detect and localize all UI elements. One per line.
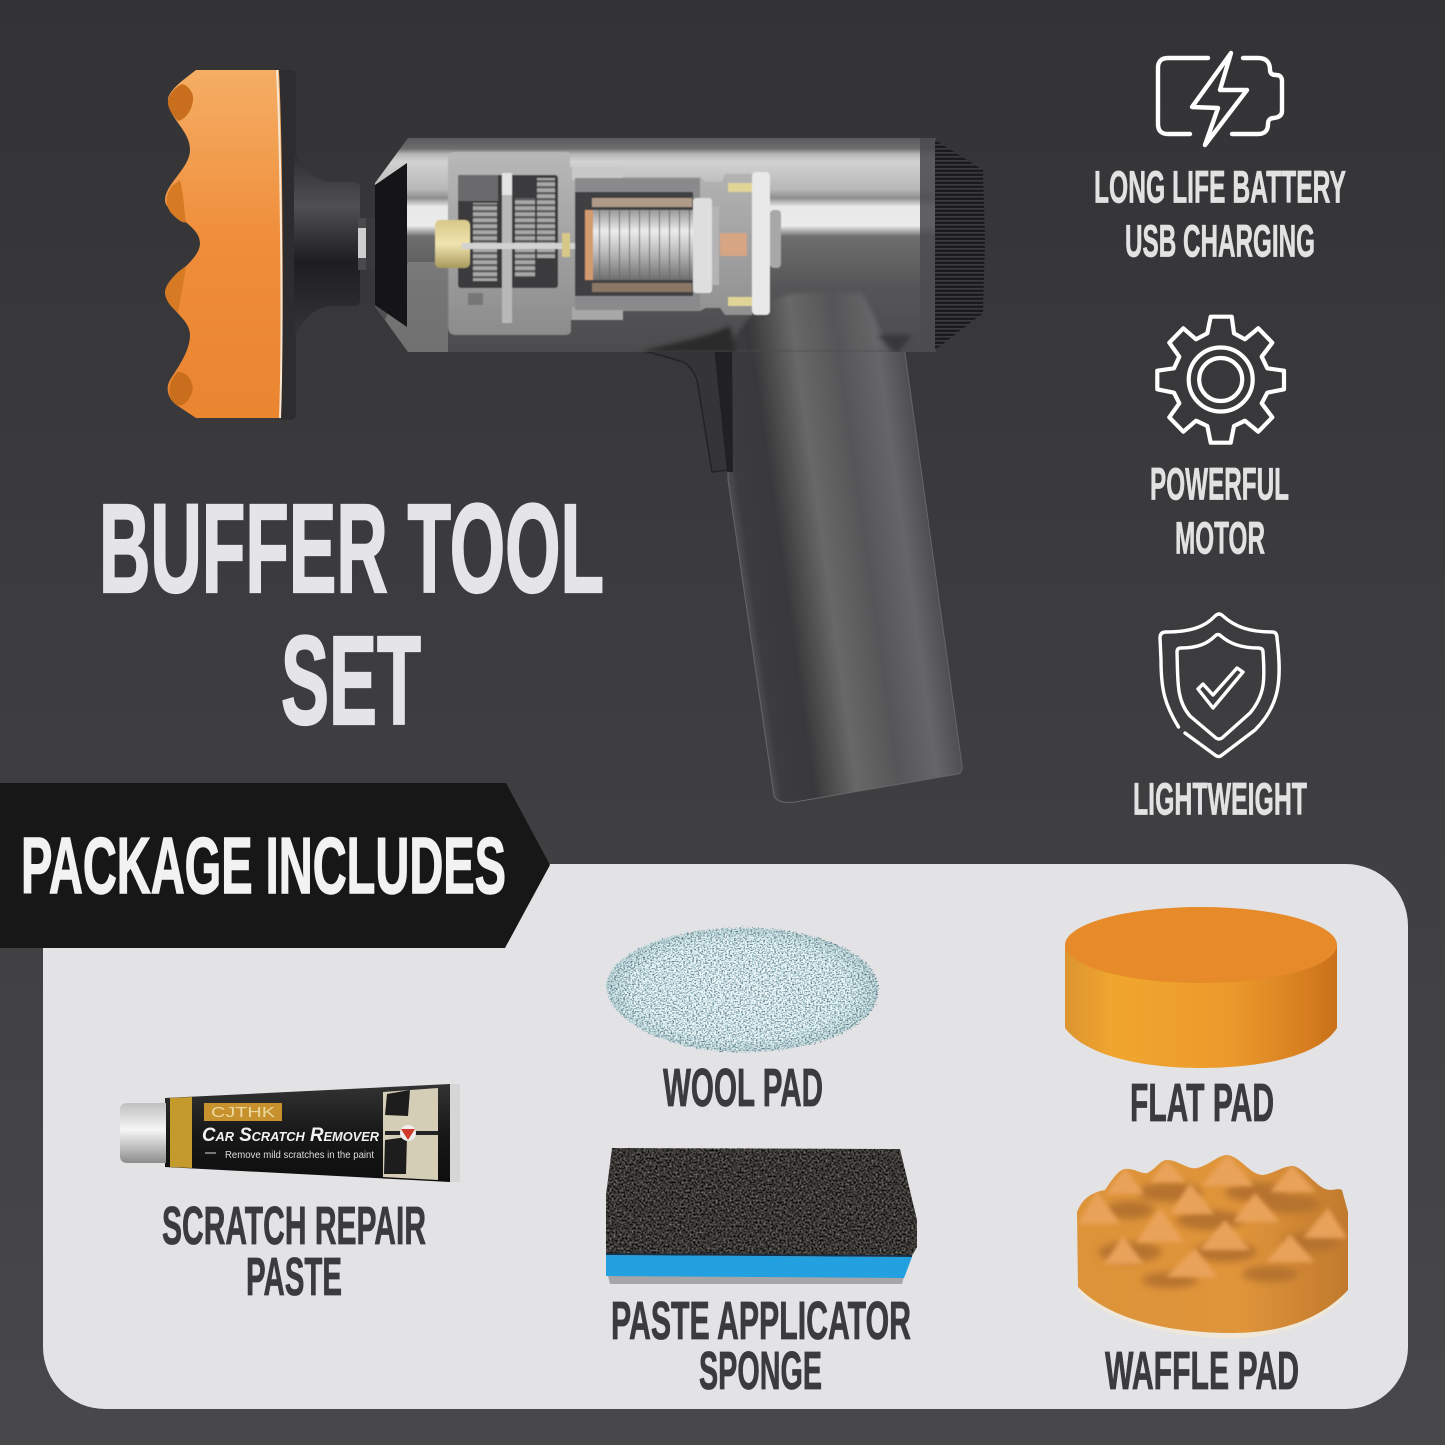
item: flat pad [1065,907,1337,1133]
item: paste applicator sponge [606,1148,917,1401]
image: paste tube: Car Scratch Remover [202,1125,380,1146]
feature: powerful motor: POWERFUL [1150,458,1289,510]
knurled rear cap [935,140,985,350]
image: waffle foam pad [1077,1154,1348,1338]
item: paste applicator sponge: PASTE APPLICATOR [611,1291,911,1351]
icon: battery [1158,53,1282,145]
title: SET [281,610,421,751]
cutaway interior [435,152,781,335]
feature: lightweight: LIGHTWEIGHT [1133,774,1307,824]
polishing pad [165,70,296,420]
feature: lightweight [1133,614,1307,824]
icon: shield with check [1160,614,1279,756]
icon: gear [1157,317,1284,443]
panel: package contents [43,864,1408,1409]
product image: buffer tool [165,70,985,802]
image: applicator sponge [606,1148,917,1284]
backing neck [294,150,360,336]
feature: long life battery [1094,53,1346,266]
metal body [375,138,935,352]
title: BUFFER TOOL [99,478,604,619]
item: scratch repair paste: PASTE [246,1247,342,1307]
item: flat pad: FLAT PAD [1130,1073,1274,1133]
handle shoulder [640,293,912,354]
image: paste tube: Remove mild scratches in the paint [225,1150,374,1161]
peaks [1078,1154,1347,1277]
image: paste tube: CJTHK [211,1104,275,1121]
item: scratch repair paste: SCRATCH REPAIR [162,1196,426,1256]
trigger [640,340,733,472]
item: wool pad: WOOL PAD [663,1058,823,1118]
valleys [1098,1182,1338,1288]
grip handle [728,293,962,802]
item: waffle pad [1077,1154,1348,1401]
title [99,478,604,751]
image: wool pad [606,928,878,1052]
image: flat foam pad [1065,907,1337,1068]
item: paste applicator sponge: SPONGE [699,1341,822,1401]
banner: package includes: PACKAGE INCLUDES [21,821,506,910]
nose cone [375,163,407,327]
feature: powerful motor [1150,317,1289,564]
item: wool pad [606,928,878,1118]
drive shaft [358,218,376,270]
banner: package includes [0,783,550,948]
gearbox [435,173,585,323]
rear collar [920,138,936,352]
image: paste tube [120,1084,460,1182]
item: scratch repair paste [120,1084,460,1307]
item: waffle pad: WAFFLE PAD [1105,1341,1299,1401]
motor [575,172,781,315]
feature: powerful motor: MOTOR [1175,512,1265,564]
